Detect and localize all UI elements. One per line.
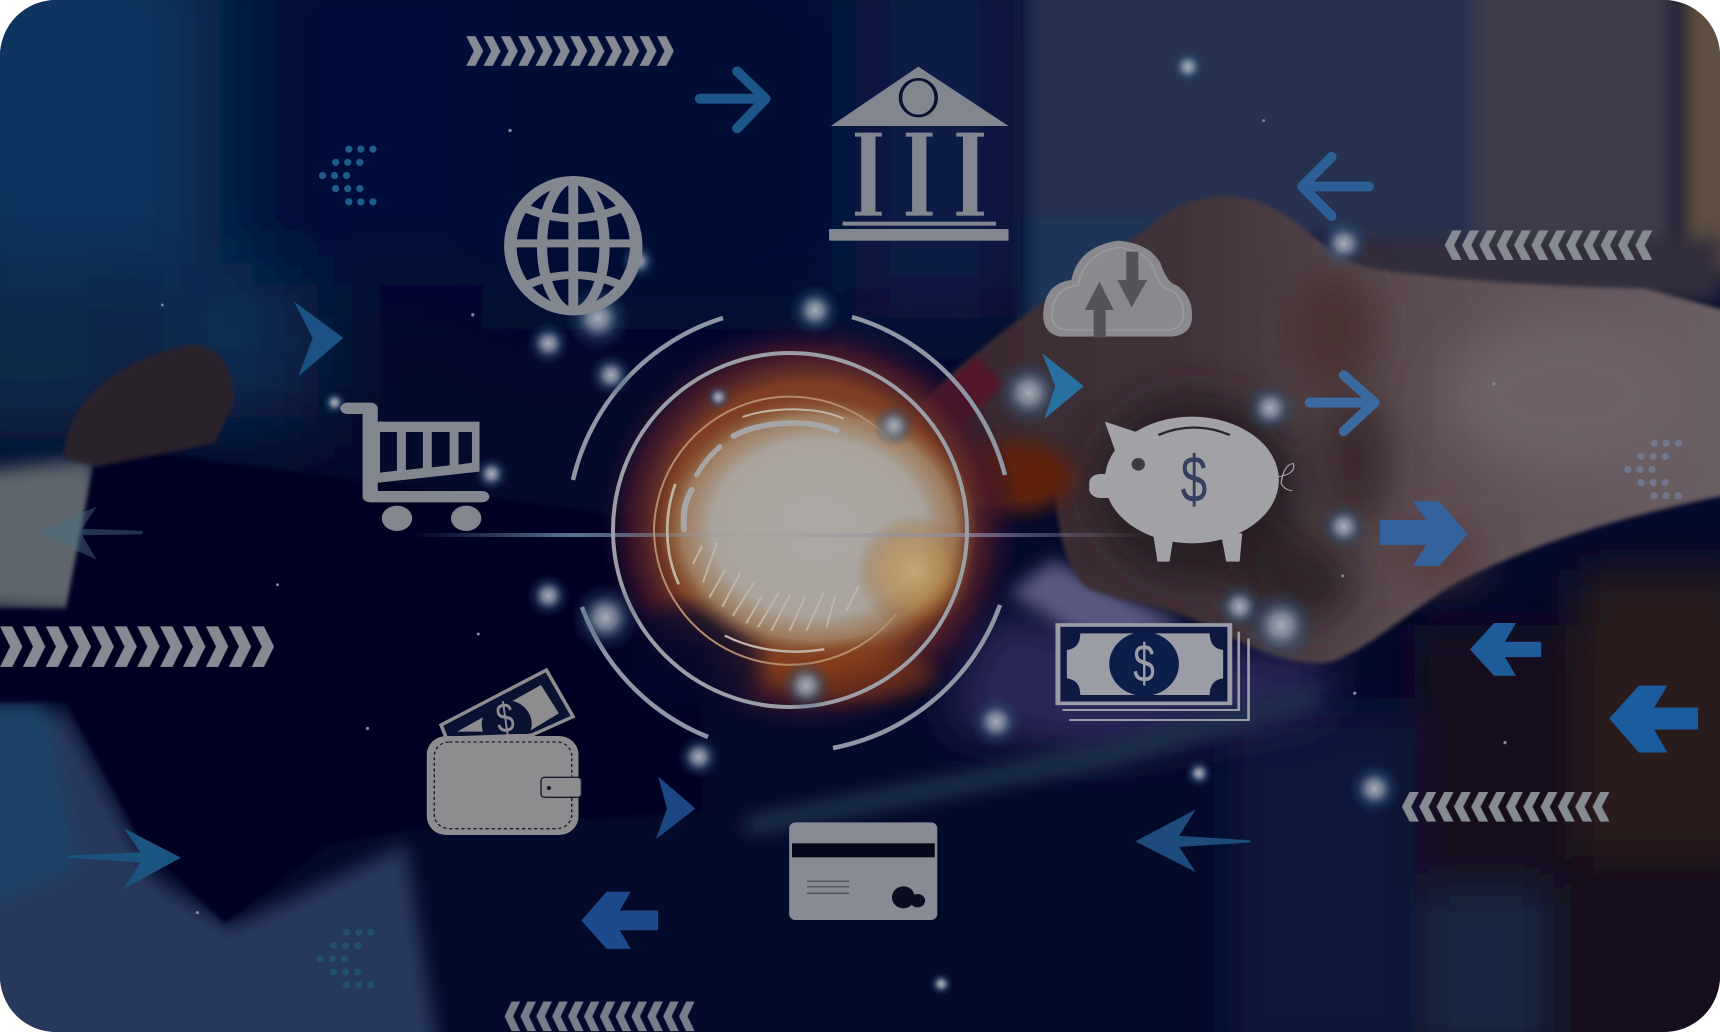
dots: lower left [317,929,374,989]
chevron: left [294,302,343,376]
dollar sign on piggy: $ [1181,443,1207,517]
lens flare [410,533,1150,537]
chevron: center right [1042,353,1084,419]
arrow: mid right right-pointing [1310,375,1374,431]
chevron: lower center [656,777,695,839]
chevron strip: bottom [505,1002,694,1031]
outer ring [613,353,967,707]
central fingerprint rings [573,317,1005,748]
icon: piggy bank [1089,417,1294,562]
outer arc segments [573,317,1005,748]
icon: globe [509,180,638,312]
dollar sign on banknote: $ [1133,633,1155,693]
icon: banknote stack [1058,625,1249,720]
arrow: upper right left-pointing [1302,157,1369,216]
swoosh arrow: lower right [1135,810,1251,872]
icon: cloud with arrows [1043,241,1192,337]
dot patterns [317,146,1682,989]
central glow [598,317,1022,733]
tablet highlights [943,614,1327,757]
arrow: block right [1380,501,1468,566]
icon: credit card [789,822,937,920]
chevron strip: right lower [1402,792,1609,822]
hand [916,196,1720,663]
arrow: block left [1470,623,1541,676]
arrow: block left lower [1609,686,1698,753]
icon: shopping cart [348,408,482,531]
dots: upper left [319,146,377,205]
fingerprint strokes [667,409,858,652]
inner thin ring [654,397,898,665]
dots: right [1624,440,1682,499]
arrow: block left bottom [581,892,658,949]
thumb [64,345,233,466]
dollar sign on wallet note: $ [493,693,517,742]
chevron strip: right upper [1445,230,1652,260]
chevron strip: left [0,626,274,667]
swoosh arrow: faint left [35,507,143,559]
icon: wallet with banknote [427,670,581,835]
arrow: top right-pointing [700,71,766,128]
bokeh light spots [161,49,1507,996]
swoosh arrow: lower left [68,828,181,889]
left light regions [0,459,439,1032]
chevron strip: top [466,36,674,66]
icon: bank [829,67,1009,241]
